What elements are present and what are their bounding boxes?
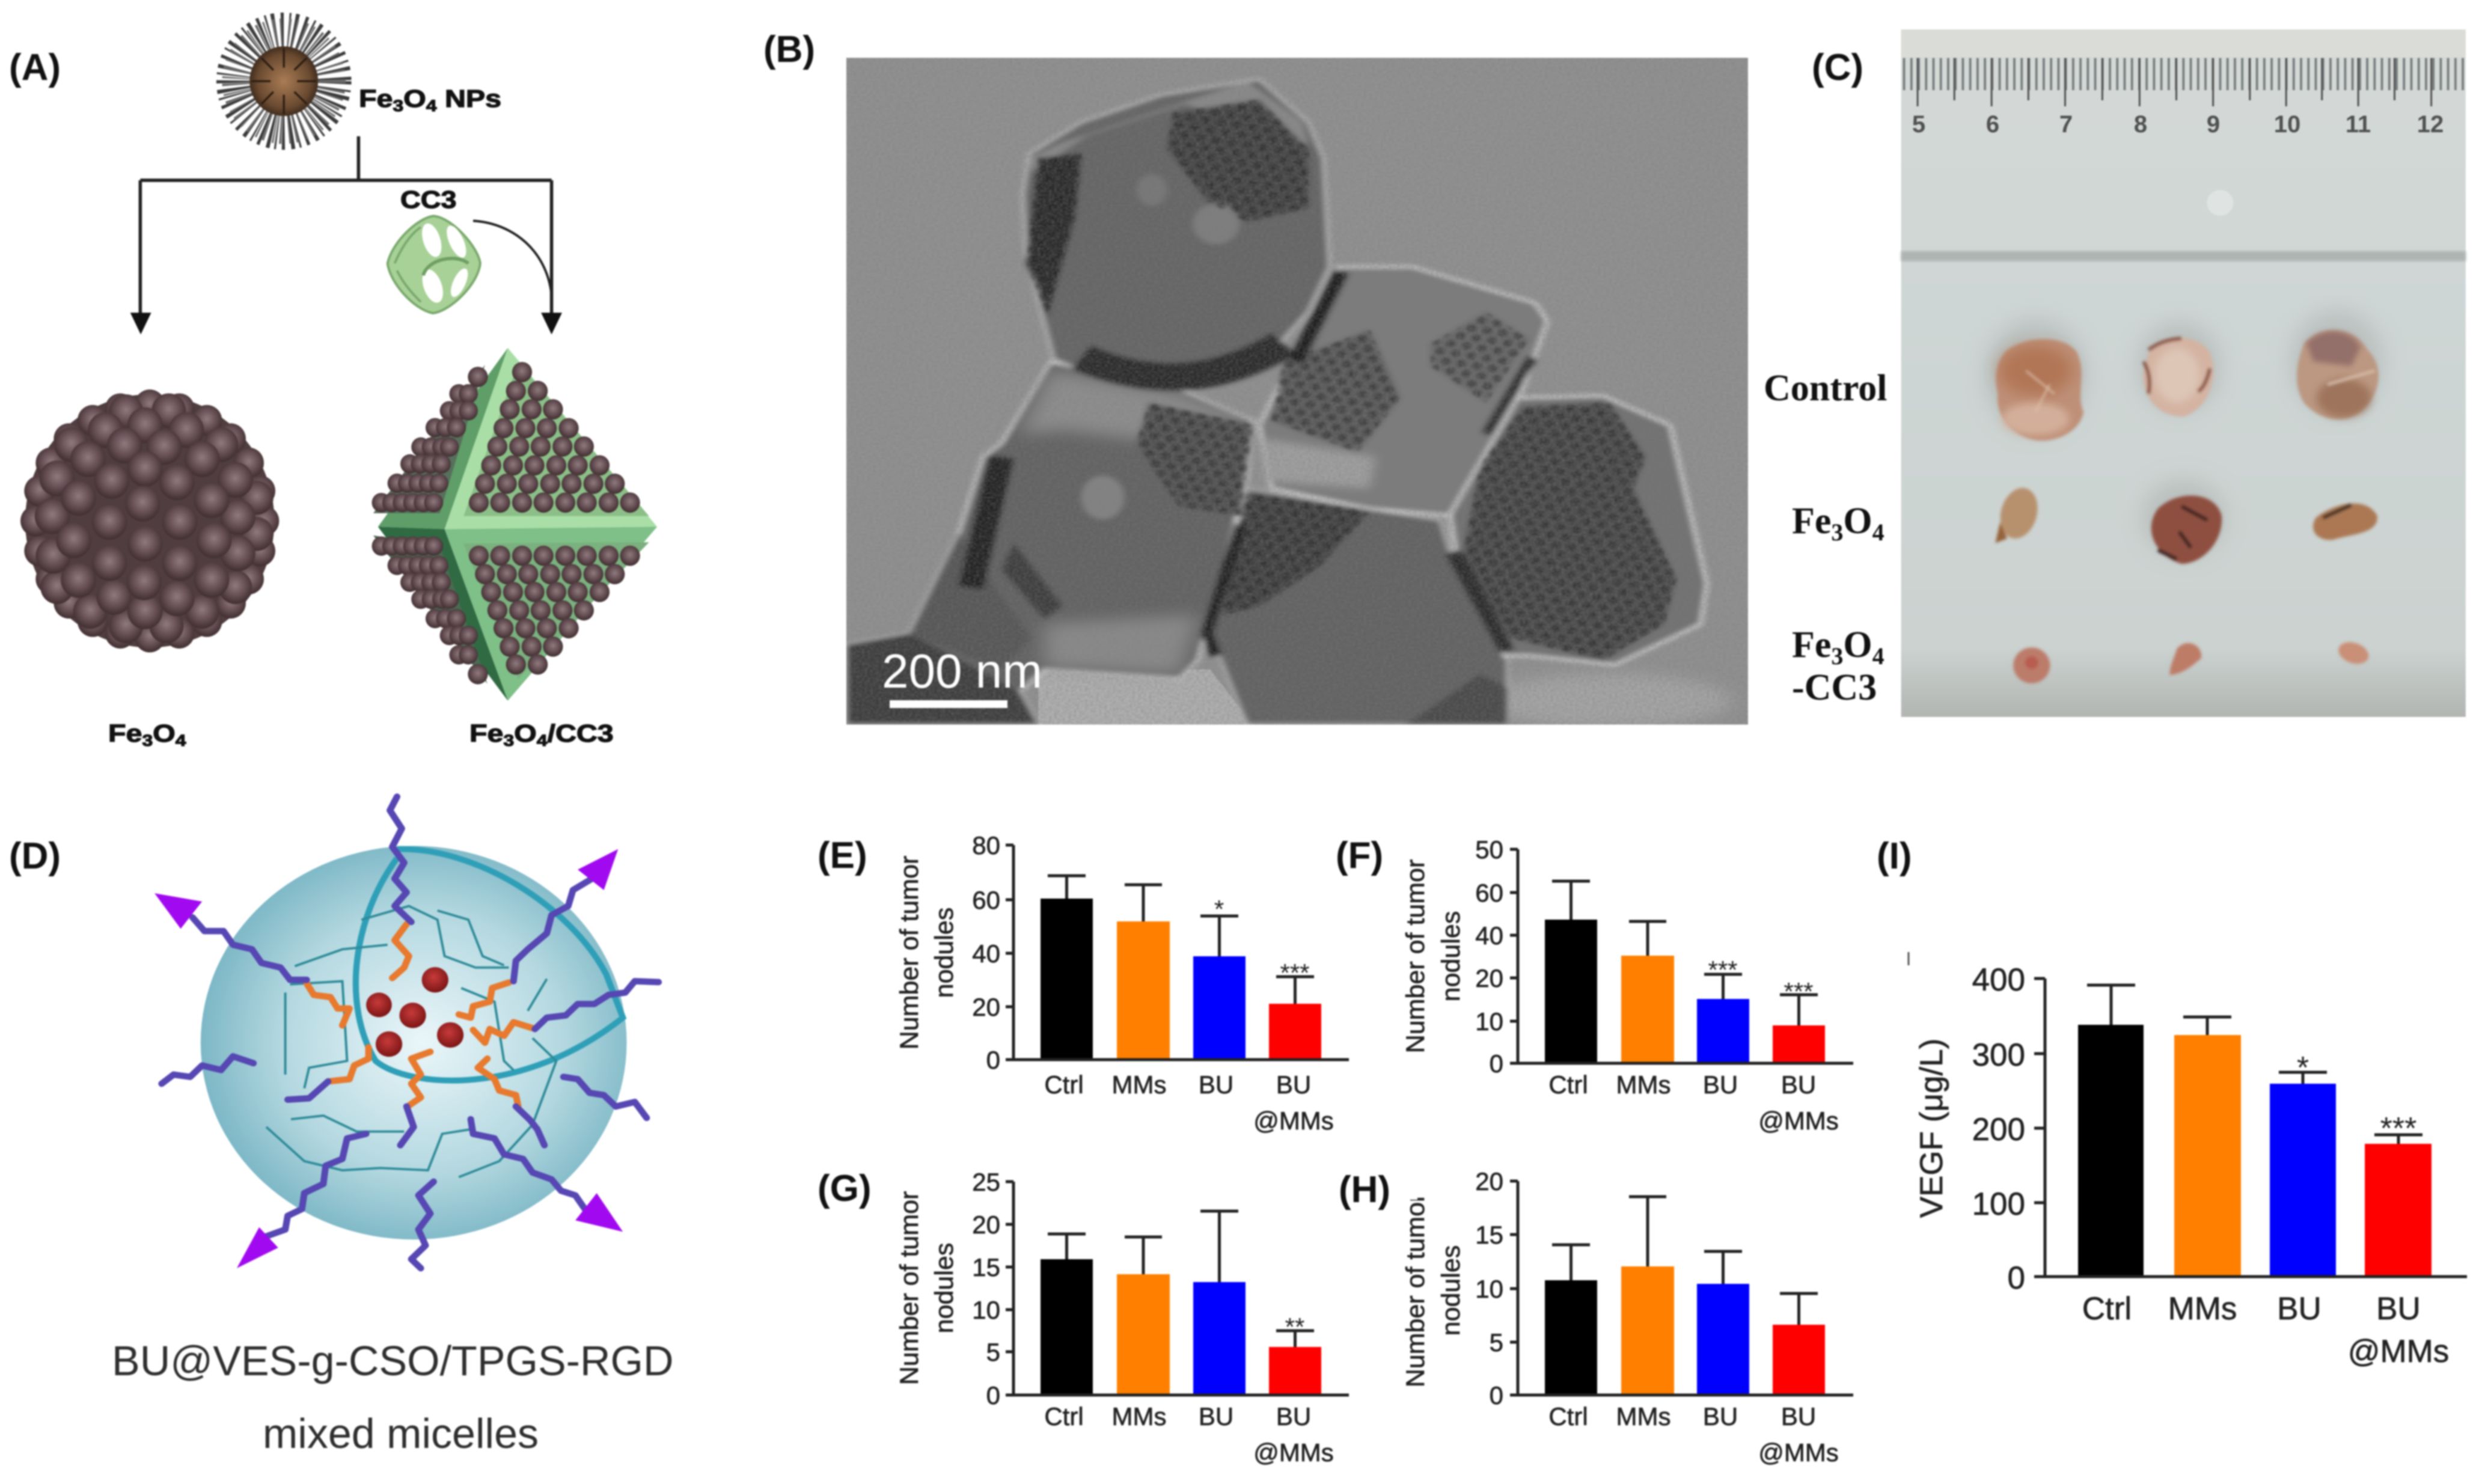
ruler numbers: 7 [2059, 111, 2073, 138]
bars [1041, 1259, 1321, 1395]
row label: Fe3O4-CC3: O [1843, 624, 1872, 665]
label: Fe3O4 NPs: O [403, 85, 426, 112]
ruler numbers: 10 [2274, 111, 2300, 138]
panel label: A: (A) [9, 47, 61, 88]
label: Fe3O4: 4 [176, 731, 186, 750]
tick labels: 0 [2008, 1260, 2025, 1296]
y axis title: nodules [1437, 1245, 1466, 1336]
tick labels: 0 [986, 1046, 1000, 1074]
category labels: BU [1703, 1070, 1738, 1099]
label: Fe3O4: 3 [142, 731, 153, 750]
polymer strands [266, 906, 556, 1177]
drug cores [366, 967, 463, 1057]
row label: Control: Control [1764, 368, 1887, 409]
chart H [1399, 1167, 1853, 1467]
category labels [1044, 1070, 1334, 1135]
category labels [1548, 1070, 1839, 1135]
error bars [1552, 881, 1818, 1025]
category labels: Ctrl [1548, 1402, 1588, 1431]
icon: Fe3O4 nanoparticle with ligands [235, 31, 333, 131]
significance stars [2297, 1051, 2416, 1146]
arrow: branching arrows [130, 136, 562, 334]
category labels: BU [1276, 1070, 1311, 1099]
panel label: E: (E) [818, 835, 867, 876]
label: Fe3O4 NPs: NPs [437, 85, 501, 112]
axes [1006, 1182, 1349, 1395]
tick labels: 25 [972, 1168, 1000, 1196]
panel label: D: (D) [9, 835, 61, 877]
clipped tail of the title [1399, 1191, 1417, 1200]
category labels: Ctrl [2082, 1291, 2132, 1327]
caption: mixed micelles: mixed micelles [263, 1410, 539, 1457]
category labels: BU [1703, 1402, 1738, 1431]
icon: CC3 cage [388, 216, 480, 313]
category labels: BU [1781, 1070, 1816, 1099]
category labels: MMs [2168, 1291, 2237, 1327]
category labels: BU [2277, 1291, 2322, 1327]
tick labels: 100 [1972, 1186, 2025, 1222]
micelle inner shell [356, 849, 623, 1081]
bars [2078, 1025, 2432, 1277]
label: Fe3O4 NPs: 4 [426, 97, 437, 115]
tick labels: 200 [1972, 1112, 2025, 1147]
tick labels: 15 [1475, 1221, 1503, 1249]
tick labels: 10 [1475, 1007, 1503, 1036]
tick labels: 20 [972, 1211, 1000, 1239]
category labels: BU [1781, 1402, 1816, 1431]
tick labels: 300 [1972, 1037, 2025, 1073]
bars [1041, 899, 1321, 1060]
bars [1545, 1266, 1825, 1395]
category labels: Ctrl [1044, 1402, 1084, 1431]
tick labels: 15 [972, 1253, 1000, 1281]
y axis title: VEGF (μg/L) [1914, 1039, 1949, 1218]
category labels: @MMs [1758, 1107, 1839, 1135]
tick labels: 0 [986, 1381, 1000, 1409]
panel label: I: (I) [1877, 835, 1912, 877]
category labels: BU [1199, 1070, 1233, 1099]
category labels: @MMs [1253, 1438, 1334, 1467]
icon: Fe3O4 aggregated sphere [20, 389, 279, 652]
significance stars: ** [1285, 1313, 1304, 1341]
scale bar: 200 nm: 200 nm [882, 644, 1042, 698]
tick labels: 400 [1972, 962, 2025, 998]
chart I: VEGF [1909, 952, 2467, 1369]
row label: Fe3O4-CC3: 3 [1831, 643, 1843, 670]
tick labels [972, 831, 1000, 1074]
chart F [1401, 835, 1853, 1135]
panel A: synthesis schematic [20, 31, 657, 701]
category labels [1044, 1402, 1334, 1467]
tick labels: 10 [972, 1296, 1000, 1324]
axes [1006, 845, 1349, 1060]
category labels: @MMs [2348, 1334, 2449, 1369]
tick labels [1475, 835, 1503, 1078]
y axis title [895, 856, 959, 1049]
axes [1510, 1181, 1853, 1395]
category labels: MMs [1616, 1402, 1670, 1431]
RGD arrowheads [154, 849, 623, 1268]
label: Fe3O4/CC3: 4 [537, 731, 548, 750]
tick labels: 5 [986, 1338, 1000, 1366]
tick labels: 20 [972, 993, 1000, 1021]
category labels: @MMs [1758, 1438, 1839, 1467]
category labels: BU [2376, 1291, 2421, 1327]
tick labels: 20 [1475, 1167, 1503, 1195]
y axis title: nodules [930, 908, 959, 998]
category labels: MMs [1112, 1402, 1166, 1431]
chart G [895, 1168, 1349, 1467]
panel label: F: (F) [1336, 835, 1383, 876]
row label: Fe3O4: 3 [1831, 519, 1843, 546]
label: Fe3O4/CC3: Fe [469, 719, 503, 747]
row label: Fe3O4: O [1843, 501, 1872, 542]
row label: Fe3O4-CC3: -CC3 [1792, 667, 1877, 708]
y axis title: Number of tumor [895, 1191, 924, 1385]
significance stars: * [2297, 1051, 2309, 1086]
y axis title: nodules [930, 1243, 959, 1333]
category labels: Ctrl [1548, 1070, 1588, 1099]
axes [2034, 979, 2467, 1277]
chart E [895, 831, 1349, 1135]
tick labels: 40 [1475, 921, 1503, 950]
category labels [1548, 1402, 1839, 1467]
tick labels: 5 [1490, 1328, 1503, 1357]
ruler numbers: 6 [1986, 111, 1999, 138]
significance stars [1214, 895, 1310, 987]
y axis title [895, 1191, 959, 1385]
tick labels [1972, 962, 2025, 1296]
y axis title: nodules [1437, 911, 1466, 1001]
tick labels: 50 [1475, 835, 1503, 864]
ruler numbers: 8 [2134, 111, 2147, 138]
row label: Fe3O4: 4 [1872, 519, 1884, 546]
ruler ticks [1901, 57, 2465, 106]
y axis title: Number of tumor [1401, 1194, 1430, 1387]
row label: Fe3O4-CC3: 4 [1872, 643, 1884, 670]
label: Fe3O4/CC3: /CC3 [548, 719, 614, 747]
panel B: TEM micrograph [846, 58, 1748, 728]
label: Fe3O4 NPs: 3 [393, 97, 403, 115]
micelle sphere [201, 846, 627, 1239]
panel label: G: (G) [818, 1168, 872, 1209]
row label: Fe3O4: Fe [1792, 501, 1831, 542]
label: Fe3O4/CC3: O [514, 719, 537, 747]
tick labels: 20 [1475, 964, 1503, 992]
caption: micelle formula: BU@VES-g-CSO/TPGS-RGD [112, 1337, 674, 1384]
panel label: B: (B) [763, 29, 815, 70]
ruler numbers: 11 [2346, 111, 2371, 138]
label: Fe3O4: O [153, 719, 176, 747]
ruler numbers: 5 [1912, 111, 1925, 138]
error bars [1552, 1197, 1818, 1325]
label: CC3: CC3 [400, 186, 456, 213]
category labels: BU [1199, 1402, 1233, 1431]
ruler numbers: 9 [2207, 111, 2220, 138]
tick labels [972, 1168, 1000, 1409]
label: Fe3O4: Fe [108, 719, 142, 747]
tick labels: 10 [1475, 1275, 1503, 1303]
category labels: Ctrl [1044, 1070, 1084, 1099]
tumor specimens [1984, 308, 2384, 683]
ruler numbers [1912, 111, 2444, 138]
error bars [1048, 1211, 1314, 1347]
icon: Fe3O4/CC3 octahedron [372, 348, 657, 701]
label: Fe3O4/CC3: 3 [503, 731, 514, 750]
panel C: tumor photograph [1901, 29, 2466, 717]
significance stars: *** [2380, 1111, 2416, 1146]
panel label: C: (C) [1812, 47, 1863, 88]
hydrophilic purple chains [162, 796, 659, 1268]
tick labels: 0 [1490, 1049, 1503, 1078]
significance stars [1708, 956, 1814, 1006]
panel D: micelle diagram [154, 796, 659, 1268]
y axis title [1401, 860, 1466, 1053]
error bars [1048, 876, 1314, 1004]
significance stars: *** [1280, 959, 1310, 987]
tick labels: 60 [972, 886, 1000, 914]
error bars [2087, 985, 2422, 1144]
tick labels: 0 [1490, 1381, 1503, 1409]
significance stars: *** [1784, 977, 1814, 1006]
ruler numbers: 12 [2417, 111, 2444, 138]
tick labels: 40 [972, 939, 1000, 968]
panel label: H: (H) [1339, 1169, 1390, 1211]
y axis title: Number of tumor [1401, 860, 1430, 1053]
category labels: BU [1276, 1402, 1311, 1431]
tick labels [1475, 1167, 1503, 1409]
category labels: @MMs [1253, 1107, 1334, 1135]
row label: Fe3O4-CC3: Fe [1792, 624, 1831, 665]
significance stars: *** [1708, 956, 1738, 984]
category labels: MMs [1112, 1070, 1166, 1099]
tick labels: 80 [972, 831, 1000, 860]
stray tick [1908, 952, 1909, 965]
tick labels: 60 [1475, 879, 1503, 907]
bars [1545, 920, 1825, 1063]
hydrophobic orange chains [307, 924, 533, 1107]
axes [1510, 849, 1853, 1063]
category labels: MMs [1616, 1070, 1670, 1099]
significance stars: * [1214, 895, 1224, 923]
label: Fe3O4 NPs: Fe [359, 85, 393, 112]
y axis title: Number of tumor [895, 856, 924, 1049]
y axis title [1401, 1194, 1466, 1387]
category labels [2082, 1291, 2449, 1369]
